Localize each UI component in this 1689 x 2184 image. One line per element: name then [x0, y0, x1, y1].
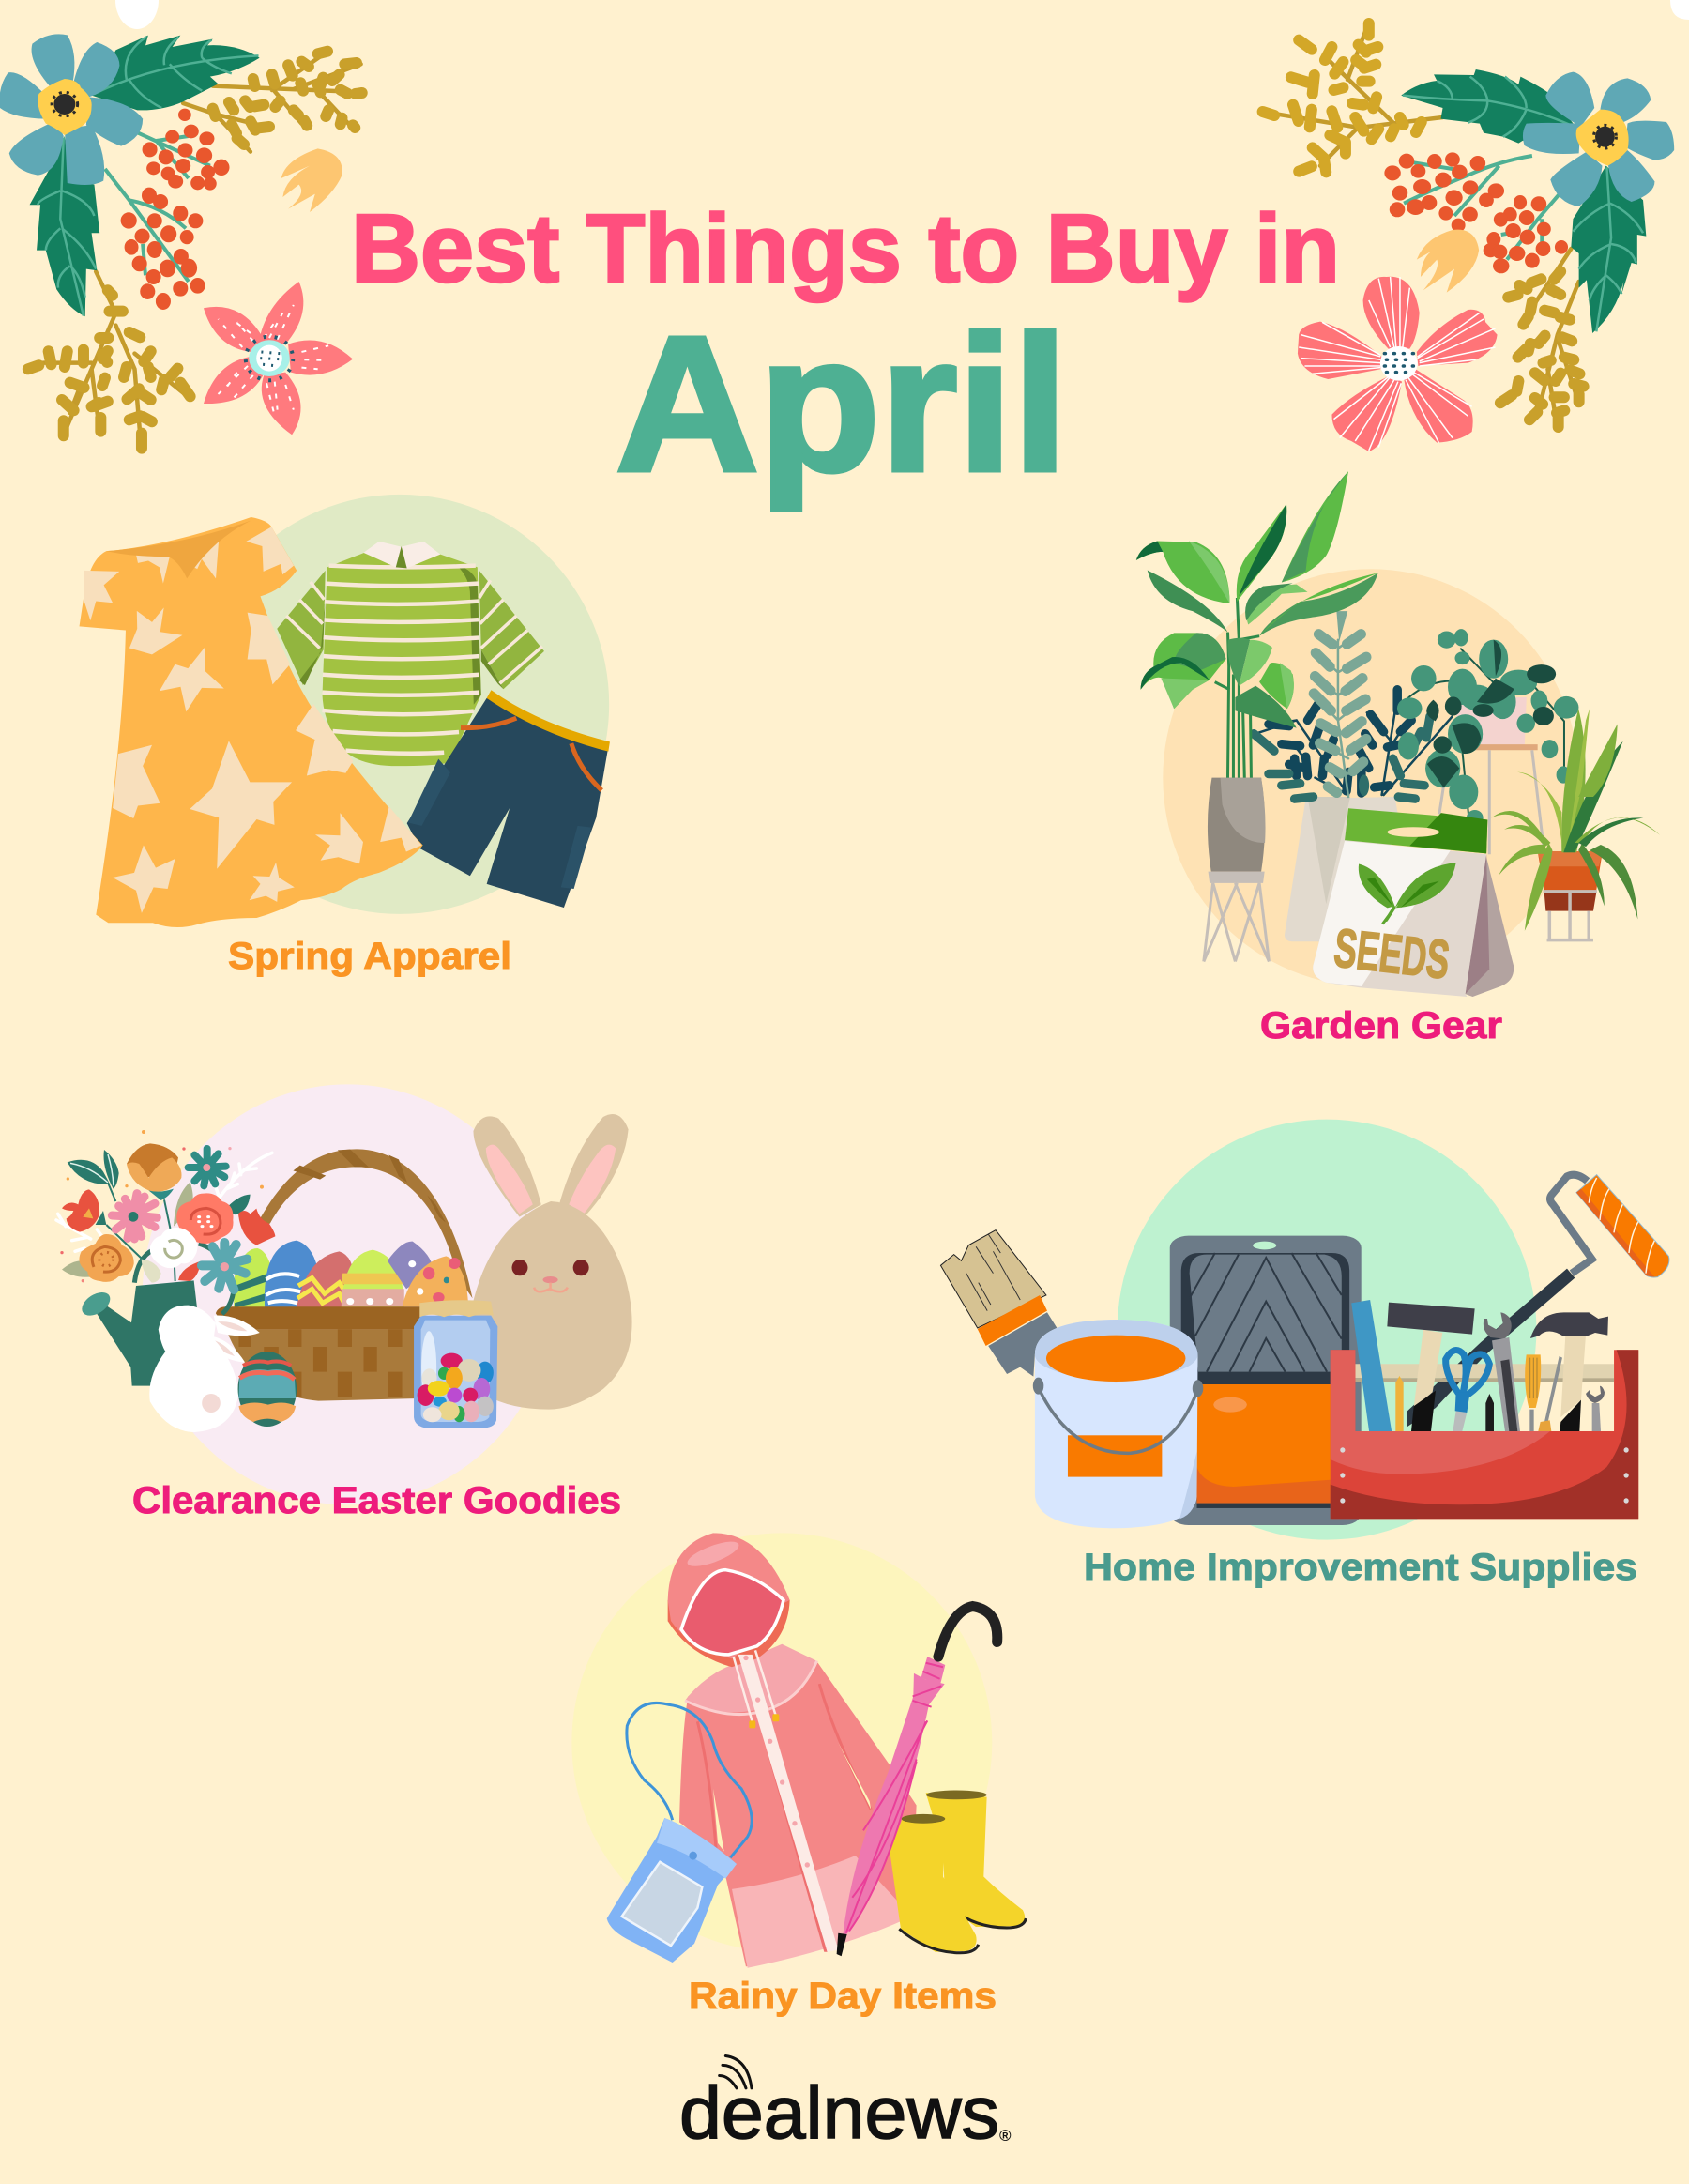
claw hammer	[1530, 1312, 1608, 1431]
small red leaf	[178, 1260, 202, 1281]
label: Clearance Easter Goodies: Clearance Easter Goodies	[132, 1480, 621, 1521]
leaves	[30, 36, 260, 316]
berries	[105, 109, 230, 310]
orange flower	[79, 1234, 134, 1282]
backdrop circle	[1118, 1120, 1536, 1540]
title line: Best Things to Buy in: Best Things to Buy in	[351, 194, 1340, 302]
denim shorts	[407, 690, 610, 908]
basket handle	[251, 1149, 473, 1298]
backdrop circle	[1163, 569, 1578, 986]
orange tulip	[127, 1143, 182, 1200]
panel: spring apparel	[80, 495, 610, 977]
pink daisy	[112, 1194, 157, 1239]
gold sprigs	[28, 50, 362, 449]
peach tulip	[282, 148, 342, 212]
panel: home improvement supplies	[940, 1120, 1669, 1588]
screwdrivers	[1525, 1354, 1562, 1431]
spider plant	[1491, 709, 1660, 940]
label: Garden Gear: Garden Gear	[1260, 1005, 1502, 1046]
pencil	[1395, 1376, 1404, 1431]
waterproof pouch	[607, 1703, 752, 1963]
hood	[668, 1533, 790, 1667]
large pink flower	[1298, 277, 1498, 451]
floral corner: top left	[0, 34, 362, 449]
small wrench	[1586, 1386, 1605, 1431]
roller	[1408, 1175, 1669, 1427]
candy jar	[414, 1300, 497, 1428]
basket body	[216, 1306, 423, 1401]
striped shirt	[277, 542, 544, 766]
label: Home Improvement Supplies: Home Improvement Supplies	[1084, 1547, 1637, 1588]
red tulip	[62, 1189, 106, 1232]
fern and dark branches	[1254, 611, 1453, 799]
peach tulip	[1417, 230, 1479, 293]
backdrop circle	[190, 495, 609, 914]
seed packet text: SEEDS	[1331, 917, 1453, 991]
scissors	[1446, 1351, 1489, 1431]
blue flower	[0, 34, 143, 185]
teal daisy	[202, 1243, 247, 1290]
panel: rainy day items	[571, 1533, 1026, 2017]
backdrop circle	[143, 1084, 553, 1504]
pencil	[1485, 1394, 1494, 1431]
hanging plant	[1397, 629, 1578, 825]
white flower	[150, 1228, 197, 1268]
berries	[1384, 152, 1568, 273]
hammer 1	[1387, 1303, 1475, 1431]
paint bucket	[1033, 1320, 1203, 1528]
boots	[890, 1790, 1026, 1953]
wrench	[1484, 1312, 1520, 1431]
gold sprigs	[1263, 22, 1584, 429]
panel: clearance easter goodies	[56, 1084, 632, 1521]
white sprigs	[56, 1153, 272, 1251]
eggs	[234, 1241, 468, 1307]
red tulip 2	[238, 1209, 275, 1245]
large bunny	[469, 1114, 632, 1410]
teal flower top	[189, 1149, 226, 1185]
star dress	[80, 517, 423, 927]
floral corner: top right	[1263, 22, 1674, 451]
decorated egg	[238, 1352, 297, 1427]
toolbox	[1331, 1350, 1638, 1519]
large plant	[1136, 471, 1378, 778]
bouquet in watering can	[56, 1130, 275, 1386]
title month: April: April	[616, 297, 1068, 512]
logo: dealnews	[679, 2055, 1012, 2154]
seed packet	[1313, 808, 1514, 997]
backdrop circle	[571, 1533, 992, 1952]
petals dots	[60, 1130, 264, 1282]
pink flower	[204, 282, 353, 435]
paint tray	[1170, 1236, 1362, 1525]
leaves	[68, 1150, 251, 1214]
raincoat	[679, 1644, 917, 1968]
back pot	[1285, 797, 1400, 941]
toolbox tools	[1354, 1175, 1669, 1431]
logo wordmark: dealnews	[679, 2070, 999, 2154]
zipper placket and strings	[734, 1650, 838, 1952]
label: Spring Apparel: Spring Apparel	[228, 936, 511, 977]
table and pink pot	[1439, 697, 1548, 884]
leaves	[1401, 69, 1646, 333]
coral rose	[176, 1193, 233, 1244]
gray pot on stand	[1204, 778, 1269, 961]
panel: garden gear	[1136, 471, 1660, 1046]
logo signal arcs	[720, 2055, 752, 2088]
title	[351, 194, 1340, 512]
paint brush	[940, 1230, 1057, 1377]
watering can body	[97, 1280, 206, 1386]
umbrella	[837, 1607, 997, 1956]
ruler	[1351, 1300, 1392, 1431]
white rabbit	[149, 1306, 260, 1432]
rod	[1354, 1364, 1614, 1378]
logo registered mark: ®	[999, 2127, 1012, 2145]
blue flower	[1523, 72, 1674, 206]
label: Rainy Day Items: Rainy Day Items	[689, 1976, 997, 2017]
